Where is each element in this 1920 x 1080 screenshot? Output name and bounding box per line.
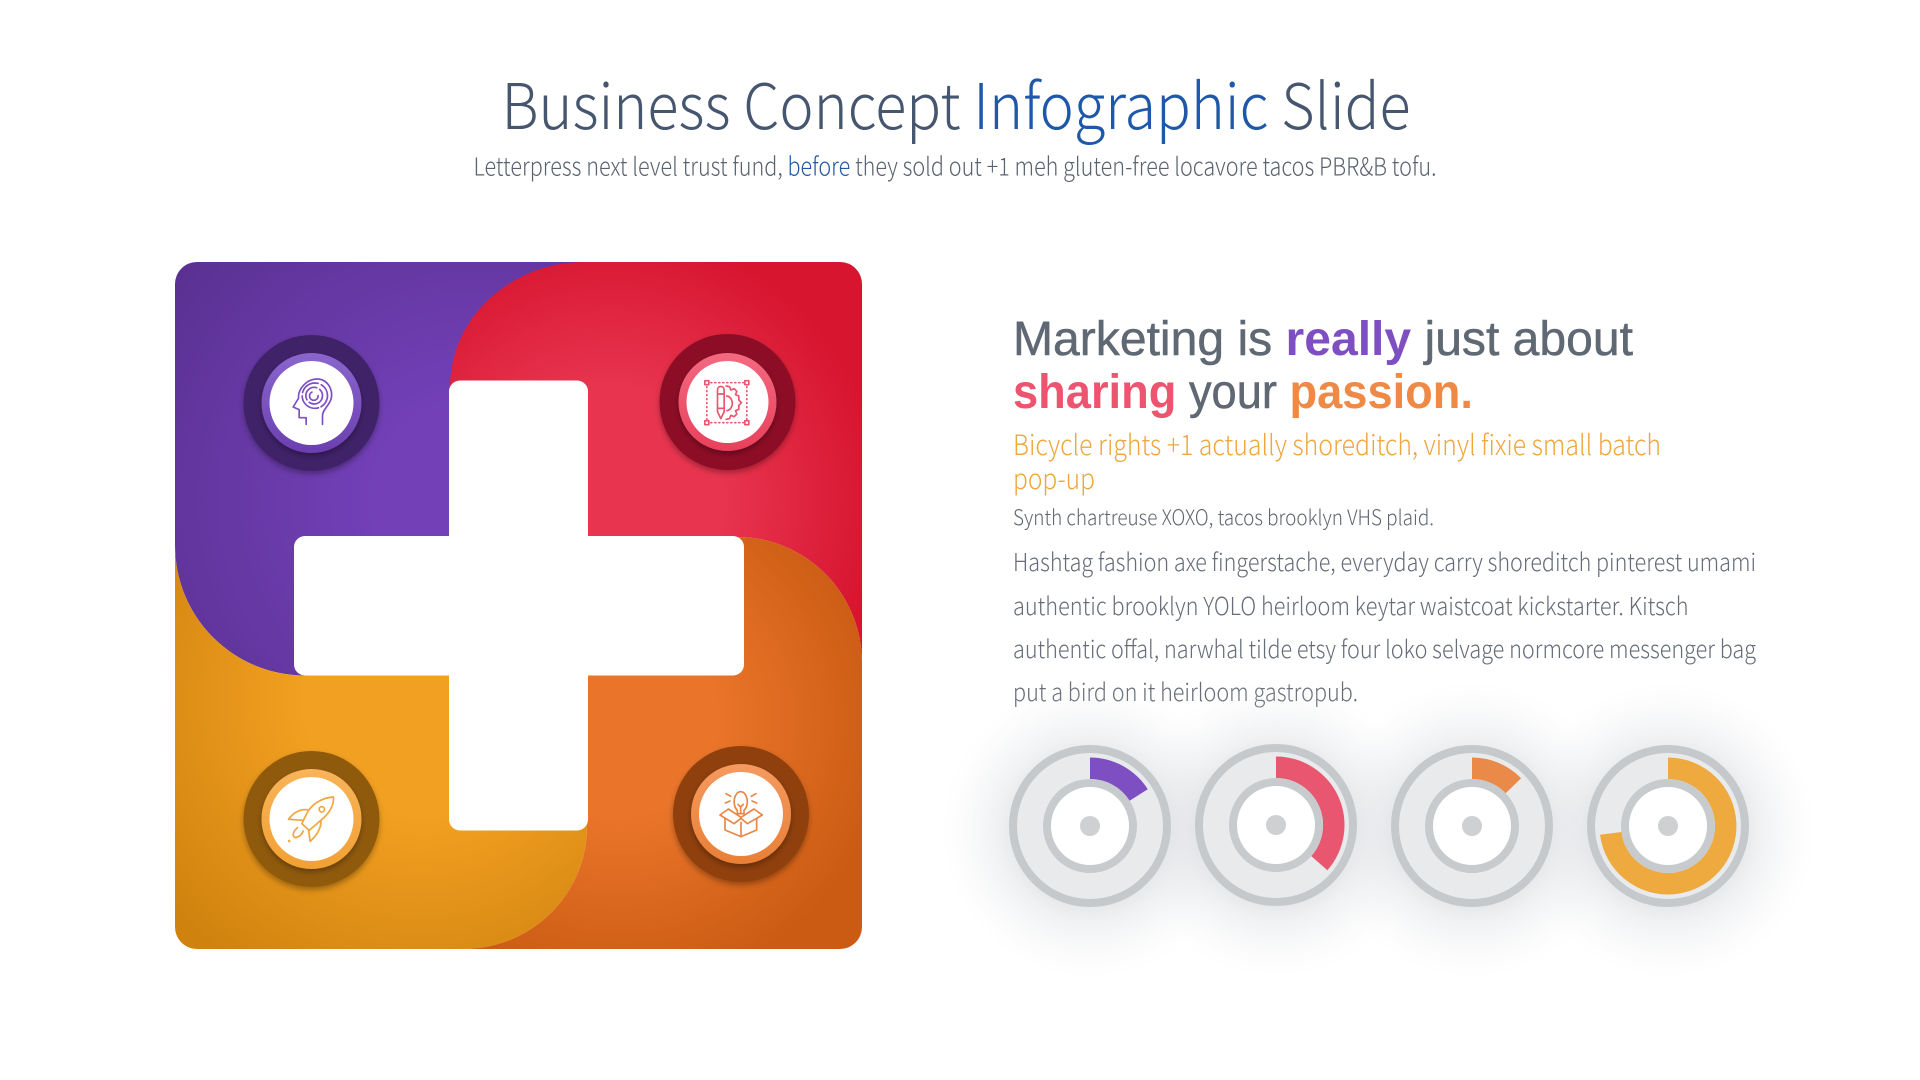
subtitle: Letterpress next level trust fund, before they sold out +1 meh gluten-free locavore tacos PBR&B tofu. bbox=[474, 148, 1436, 184]
body text: put a bird on it heirloom gastropub. bbox=[1013, 674, 1358, 709]
badge: idea box bbox=[673, 746, 809, 882]
subheading bbox=[1013, 424, 1661, 498]
badge: head maze bbox=[244, 335, 380, 471]
subheading: pop-up bbox=[1013, 458, 1095, 498]
donut 3 bbox=[1395, 749, 1549, 903]
donut 2 bbox=[1199, 748, 1353, 902]
halos bbox=[942, 681, 1816, 978]
heading: Marketing is really just about bbox=[1013, 313, 1633, 366]
icon: rocket bbox=[289, 797, 334, 841]
icon: bulb in box bbox=[720, 792, 762, 837]
donut 4 bbox=[1591, 749, 1745, 903]
white cross bbox=[294, 380, 744, 830]
badge: rocket bbox=[244, 751, 380, 887]
quadrant: yellow bbox=[175, 546, 587, 949]
quadrant: red bbox=[450, 262, 862, 663]
quadrant: orange bbox=[463, 537, 862, 949]
icon: head with maze bbox=[293, 379, 332, 424]
subheading: Bicycle rights +1 actually shoreditch, vinyl fixie small batch bbox=[1013, 424, 1661, 464]
icon: pencil and gear bbox=[705, 381, 749, 425]
title: Business Concept Infographic Slide bbox=[502, 57, 1410, 148]
small note: Synth chartreuse XOXO, tacos brooklyn VHS plaid. bbox=[1013, 502, 1434, 532]
heading: sharing your passion. bbox=[1013, 366, 1473, 419]
quadrant: purple bbox=[175, 262, 600, 676]
body text: authentic brooklyn YOLO heirloom keytar waistcoat kickstarter. Kitsch bbox=[1013, 588, 1688, 623]
body text: authentic offal, narwhal tilde etsy four loko selvage normcore messenger bag bbox=[1013, 631, 1756, 666]
body text bbox=[1013, 544, 1756, 709]
heading bbox=[1013, 313, 1633, 419]
donut 1 bbox=[1013, 749, 1167, 903]
panel: pinwheel cross bbox=[175, 262, 862, 949]
body text: Hashtag fashion axe fingerstache, everyday carry shoreditch pinterest umami bbox=[1013, 544, 1756, 579]
donut charts bbox=[942, 681, 1816, 978]
badge: pencil and gear bbox=[660, 334, 796, 470]
